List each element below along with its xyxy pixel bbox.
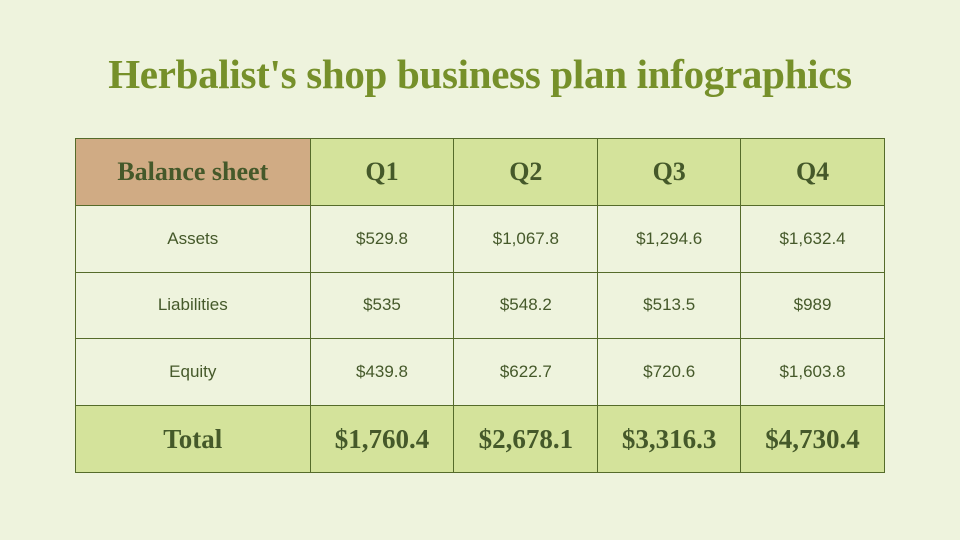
table: balance sheet: $2,678.1 xyxy=(479,424,573,454)
table: balance sheet: $513.5 xyxy=(643,295,695,314)
table: balance sheet: $622.7 xyxy=(500,362,552,381)
table: balance sheet: $4,730.4 xyxy=(765,424,860,454)
table: balance sheet: $1,067.8 xyxy=(493,229,559,248)
table: balance sheet: $1,760.4 xyxy=(335,424,429,454)
table: balance sheet: $535 xyxy=(363,295,401,314)
table: balance sheet: Assets xyxy=(167,229,218,248)
table: balance sheet: $720.6 xyxy=(643,362,695,381)
table: balance sheet: $1,632.4 xyxy=(779,229,846,248)
table: balance sheet: Q2 xyxy=(509,157,542,186)
table: balance sheet: Q3 xyxy=(653,157,686,186)
table: balance sheet: $3,316.3 xyxy=(622,424,716,454)
table: balance sheet: $439.8 xyxy=(356,362,408,381)
table: balance sheet: $989 xyxy=(794,295,831,314)
table: balance sheet: Equity xyxy=(169,362,216,381)
table: balance sheet: Total xyxy=(163,424,222,454)
table: balance sheet: $1,294.6 xyxy=(636,229,702,248)
table: balance sheet: Liabilities xyxy=(158,295,228,314)
title: Herbalist's shop business plan infographics xyxy=(108,51,852,97)
table: balance sheet xyxy=(75,138,885,473)
table: balance sheet: $548.2 xyxy=(500,295,552,314)
table: balance sheet: Balance sheet xyxy=(117,157,268,186)
table: balance sheet: Q4 xyxy=(796,157,829,186)
table: balance sheet: $529.8 xyxy=(356,229,408,248)
table: balance sheet: Q1 xyxy=(365,157,399,186)
table: balance sheet: $1,603.8 xyxy=(779,362,846,381)
